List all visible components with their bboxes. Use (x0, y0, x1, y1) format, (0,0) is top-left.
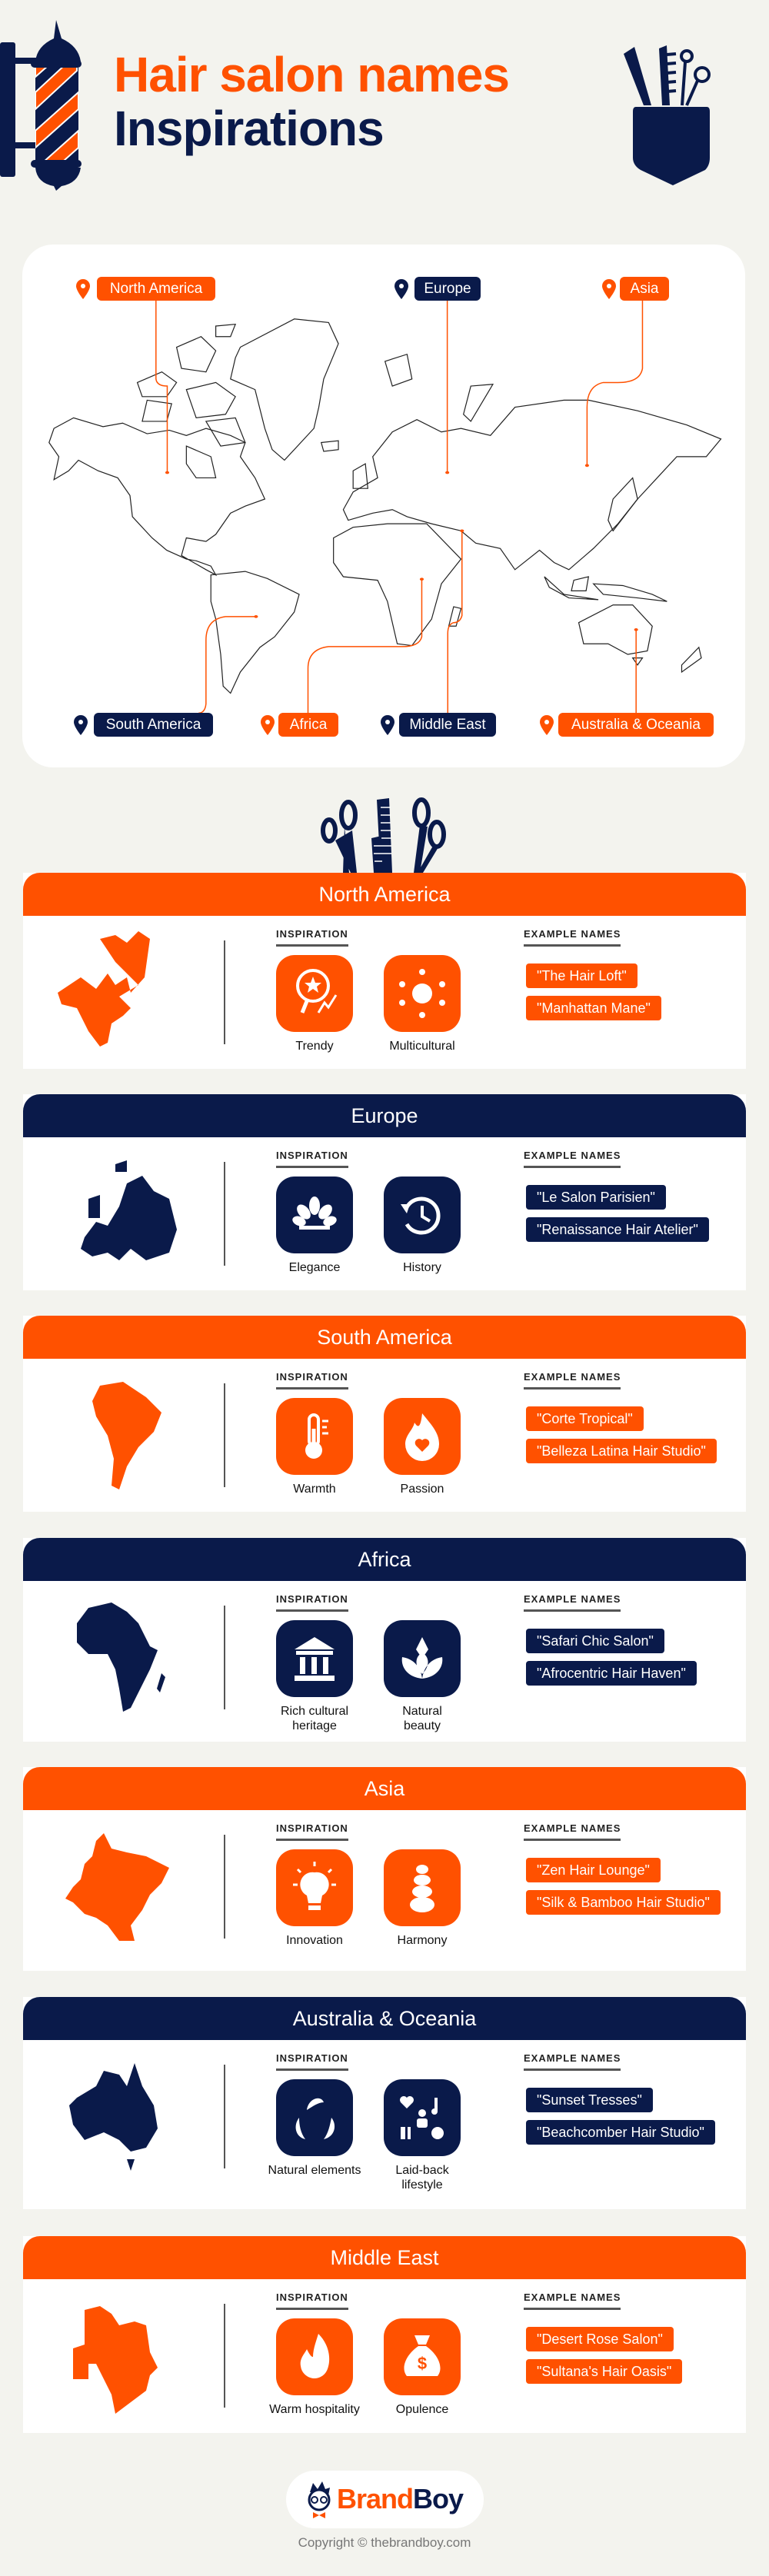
label: inspiration (276, 1150, 348, 1168)
chip: name 2 (526, 2120, 715, 2145)
map label: North America: North America (110, 281, 202, 297)
map label: South America (74, 713, 213, 737)
footer: BrandBoy logo: BrandBoy (337, 2483, 463, 2514)
chip: name 2 (526, 2359, 682, 2384)
label: inspiration: INSPIRATION (276, 2052, 348, 2064)
heading: Australia & Oceania (23, 1997, 746, 2040)
chip: name 1 (526, 1629, 664, 1653)
label: rich cultural heritage: Rich cultural (281, 1705, 348, 1718)
chip: name 1: "Safari Chic Salon" (537, 1633, 654, 1649)
label: inspiration: INSPIRATION (276, 2291, 348, 2303)
chip: name 1: "Desert Rose Salon" (537, 2331, 663, 2347)
map: Middle East silhouette (73, 2306, 158, 2414)
chip: name 2 (526, 1890, 721, 1915)
icon: elegance (276, 1177, 353, 1253)
map: Africa silhouette (77, 1603, 165, 1712)
footer: BrandBoy logo (286, 2471, 484, 2528)
icon: multicultural (384, 955, 461, 1032)
panel: Europe (23, 1094, 746, 1290)
panel: Middle East (23, 2236, 746, 2433)
icon: warm hospitality (276, 2318, 353, 2395)
heading: South America (23, 1316, 746, 1359)
chip: name 1: "Corte Tropical" (537, 1411, 633, 1426)
heading: Africa (23, 1538, 746, 1581)
chip: name 2 (526, 1439, 717, 1463)
icon: scissors and combs (321, 797, 446, 873)
map label: North America (76, 277, 215, 301)
label: inspiration: INSPIRATION (276, 1150, 348, 1161)
map label: Australia & Oceania (540, 713, 714, 737)
icon: passion (384, 1398, 461, 1475)
label: laid-back lifestyle (395, 2164, 449, 2192)
icon: natural beauty (384, 1620, 461, 1697)
icon: harmony (384, 1849, 461, 1926)
map label: Africa (261, 713, 338, 737)
chip: name 1: "Zen Hair Lounge" (537, 1862, 650, 1878)
chip: name 2: "Sultana's Hair Oasis" (537, 2364, 671, 2379)
heading: Middle East: Middle East (330, 2246, 439, 2269)
map label: Asia (602, 277, 669, 301)
panel: world map (22, 245, 745, 767)
label: warmth: Warmth (293, 1483, 336, 1496)
chip: name 2 (526, 1217, 709, 1242)
map label: Asia: Asia (631, 281, 658, 297)
label: example names (524, 1371, 621, 1390)
label: opulence: Opulence (396, 2403, 448, 2416)
icon: natural elements (276, 2079, 353, 2156)
heading: Asia (23, 1767, 746, 1810)
chip: name 2: "Silk & Bamboo Hair Studio" (537, 1895, 710, 1910)
label: inspiration (276, 1371, 348, 1390)
chip: name 1 (526, 964, 638, 988)
icon: opulence (384, 2318, 461, 2395)
label: harmony: Harmony (398, 1934, 447, 1947)
footer: copyright: Copyright © thebrandboy.com (298, 2535, 471, 2550)
label: example names (524, 2052, 621, 2071)
label: inspiration (276, 2291, 348, 2310)
map label: Australia & Oceania: Australia & Oceania (571, 717, 701, 733)
label: example names: EXAMPLE NAMES (524, 1593, 621, 1605)
label: example names: EXAMPLE NAMES (524, 2291, 621, 2303)
header: barber pole icon (0, 20, 82, 191)
title (114, 47, 509, 156)
map label: South America: South America (106, 717, 201, 733)
panel: Australia & Oceania (23, 1997, 746, 2209)
heading: North America (23, 873, 746, 916)
connector lines (156, 300, 642, 713)
chip: name 1: "The Hair Loft" (537, 968, 627, 983)
label: inspiration (276, 928, 348, 947)
label: inspiration: INSPIRATION (276, 928, 348, 940)
icon: history (384, 1177, 461, 1253)
label: multicultural: Multicultural (389, 1040, 455, 1053)
heading: North America: North America (318, 883, 451, 906)
chip: name 1 (526, 2327, 674, 2351)
label: inspiration (276, 1822, 348, 1841)
map: Europe silhouette (81, 1160, 177, 1260)
icon: warmth (276, 1398, 353, 1475)
map label: Europe: Europe (424, 281, 471, 297)
map: Australia silhouette (69, 2063, 158, 2171)
label: laid-back lifestyle: lifestyle (401, 2178, 443, 2192)
panel: Asia (23, 1767, 746, 1971)
map label: Europe (394, 277, 481, 301)
label: natural beauty (402, 1705, 442, 1732)
panel: Africa (23, 1538, 746, 1742)
label: inspiration: INSPIRATION (276, 1371, 348, 1383)
map label: Middle East (381, 713, 496, 737)
heading: Africa: Africa (358, 1548, 411, 1571)
title: Hair salon names (114, 47, 509, 102)
label: rich cultural heritage (281, 1705, 348, 1732)
label: natural elements: Natural elements (268, 2164, 361, 2177)
world map outline (48, 301, 721, 713)
chip: name 1: "Sunset Tresses" (537, 2092, 642, 2108)
label: inspiration (276, 2052, 348, 2071)
chip: name 2: "Beachcomber Hair Studio" (537, 2125, 704, 2140)
panel: South America (23, 1316, 746, 1512)
chip: name 2: "Belleza Latina Hair Studio" (537, 1443, 706, 1459)
heading: Europe: Europe (351, 1104, 418, 1127)
heading: Middle East (23, 2236, 746, 2279)
chip: name 2 (526, 996, 661, 1020)
label: example names (524, 1822, 621, 1841)
label: natural beauty: beauty (404, 1719, 441, 1732)
label: example names (524, 1150, 621, 1168)
icon: combs in cup (624, 45, 711, 185)
label: example names (524, 928, 621, 947)
label: laid-back lifestyle: Laid-back (395, 2164, 449, 2177)
label: example names (524, 1593, 621, 1612)
label: example names: EXAMPLE NAMES (524, 928, 621, 940)
label: warm hospitality: Warm hospitality (269, 2403, 360, 2416)
label: example names: EXAMPLE NAMES (524, 1371, 621, 1383)
chip: name 2 (526, 1661, 697, 1686)
icon: laid-back lifestyle (384, 2079, 461, 2156)
label: inspiration (276, 1593, 348, 1612)
chip: name 1 (526, 1406, 644, 1431)
chip: name 2: "Afrocentric Hair Haven" (537, 1666, 686, 1681)
label: innovation: Innovation (286, 1934, 343, 1947)
icon: rich cultural heritage (276, 1620, 353, 1697)
chip: name 1 (526, 2088, 653, 2112)
label: example names: EXAMPLE NAMES (524, 1150, 621, 1161)
label: inspiration: INSPIRATION (276, 1822, 348, 1834)
icon: trendy (276, 955, 353, 1032)
label: example names: EXAMPLE NAMES (524, 1822, 621, 1834)
label: natural beauty: Natural (402, 1705, 442, 1718)
chip: name 1 (526, 1858, 661, 1882)
heading: Europe (23, 1094, 746, 1137)
heading: South America: South America (317, 1326, 452, 1349)
chip: name 2: "Renaissance Hair Atelier" (537, 1222, 698, 1237)
label: elegance: Elegance (289, 1261, 340, 1274)
label: rich cultural heritage: heritage (292, 1719, 337, 1732)
map: South America silhouette (92, 1382, 161, 1489)
label: inspiration: INSPIRATION (276, 1593, 348, 1605)
chip: name 2: "Manhattan Mane" (537, 1000, 651, 1016)
chip: name 1: "Le Salon Parisien" (537, 1190, 655, 1205)
label: passion: Passion (401, 1483, 444, 1496)
heading: Asia: Asia (365, 1777, 404, 1800)
map label: Africa: Africa (290, 717, 327, 733)
label: example names: EXAMPLE NAMES (524, 2052, 621, 2064)
map: Asia silhouette (65, 1833, 169, 1941)
map label: Middle East: Middle East (409, 717, 486, 733)
label: example names (524, 2291, 621, 2310)
map: North America silhouette (58, 931, 150, 1047)
panel: North America (23, 873, 746, 1069)
heading: Australia & Oceania: Australia & Oceania (293, 2007, 476, 2030)
icon: opulence: $ (418, 2354, 427, 2373)
label: trendy: Trendy (295, 1040, 334, 1053)
label: history: History (403, 1261, 441, 1274)
icon: innovation (276, 1849, 353, 1926)
chip: name 1 (526, 1185, 666, 1210)
title: Inspirations (114, 101, 384, 156)
